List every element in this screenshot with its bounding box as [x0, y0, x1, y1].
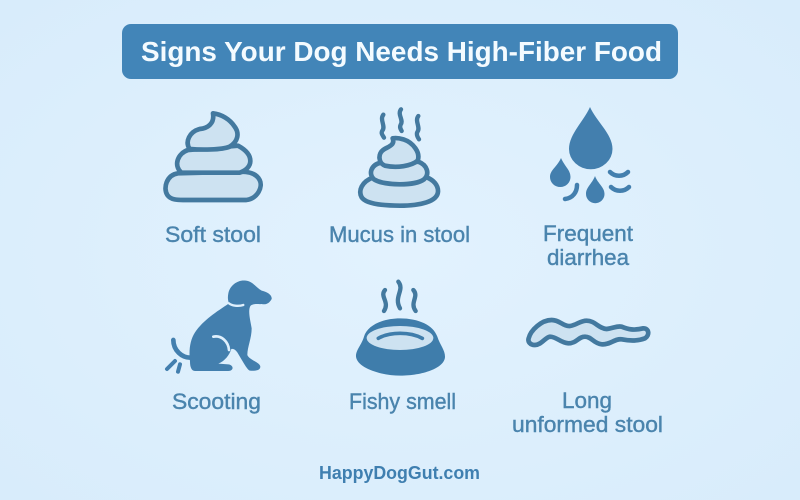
label: long unformed stool: unformed stool [512, 412, 663, 437]
title banner [122, 24, 678, 79]
icon: water drops [550, 107, 629, 203]
label: long unformed stool: Long [562, 388, 612, 413]
label: scooting: Scooting [172, 389, 261, 414]
label: frequent diarrhea [543, 221, 633, 270]
label: frequent diarrhea: Frequent [543, 221, 633, 246]
label: soft stool: Soft stool [165, 222, 261, 247]
footer: website: HappyDogGut.com [319, 463, 480, 483]
icon: fishy smelling bowl [356, 282, 445, 376]
label: long unformed stool [512, 388, 663, 437]
icon: long unformed stool [528, 320, 648, 345]
title banner: Signs Your Dog Needs High-Fiber Food [141, 36, 662, 67]
icon: scooting dog [167, 280, 272, 372]
label: mucus in stool: Mucus in stool [329, 222, 470, 247]
icon: soft stool [166, 113, 261, 200]
label: frequent diarrhea: diarrhea [547, 245, 630, 270]
icon: mucus in stool with steam [360, 109, 438, 206]
label: fishy smell: Fishy smell [349, 389, 456, 414]
